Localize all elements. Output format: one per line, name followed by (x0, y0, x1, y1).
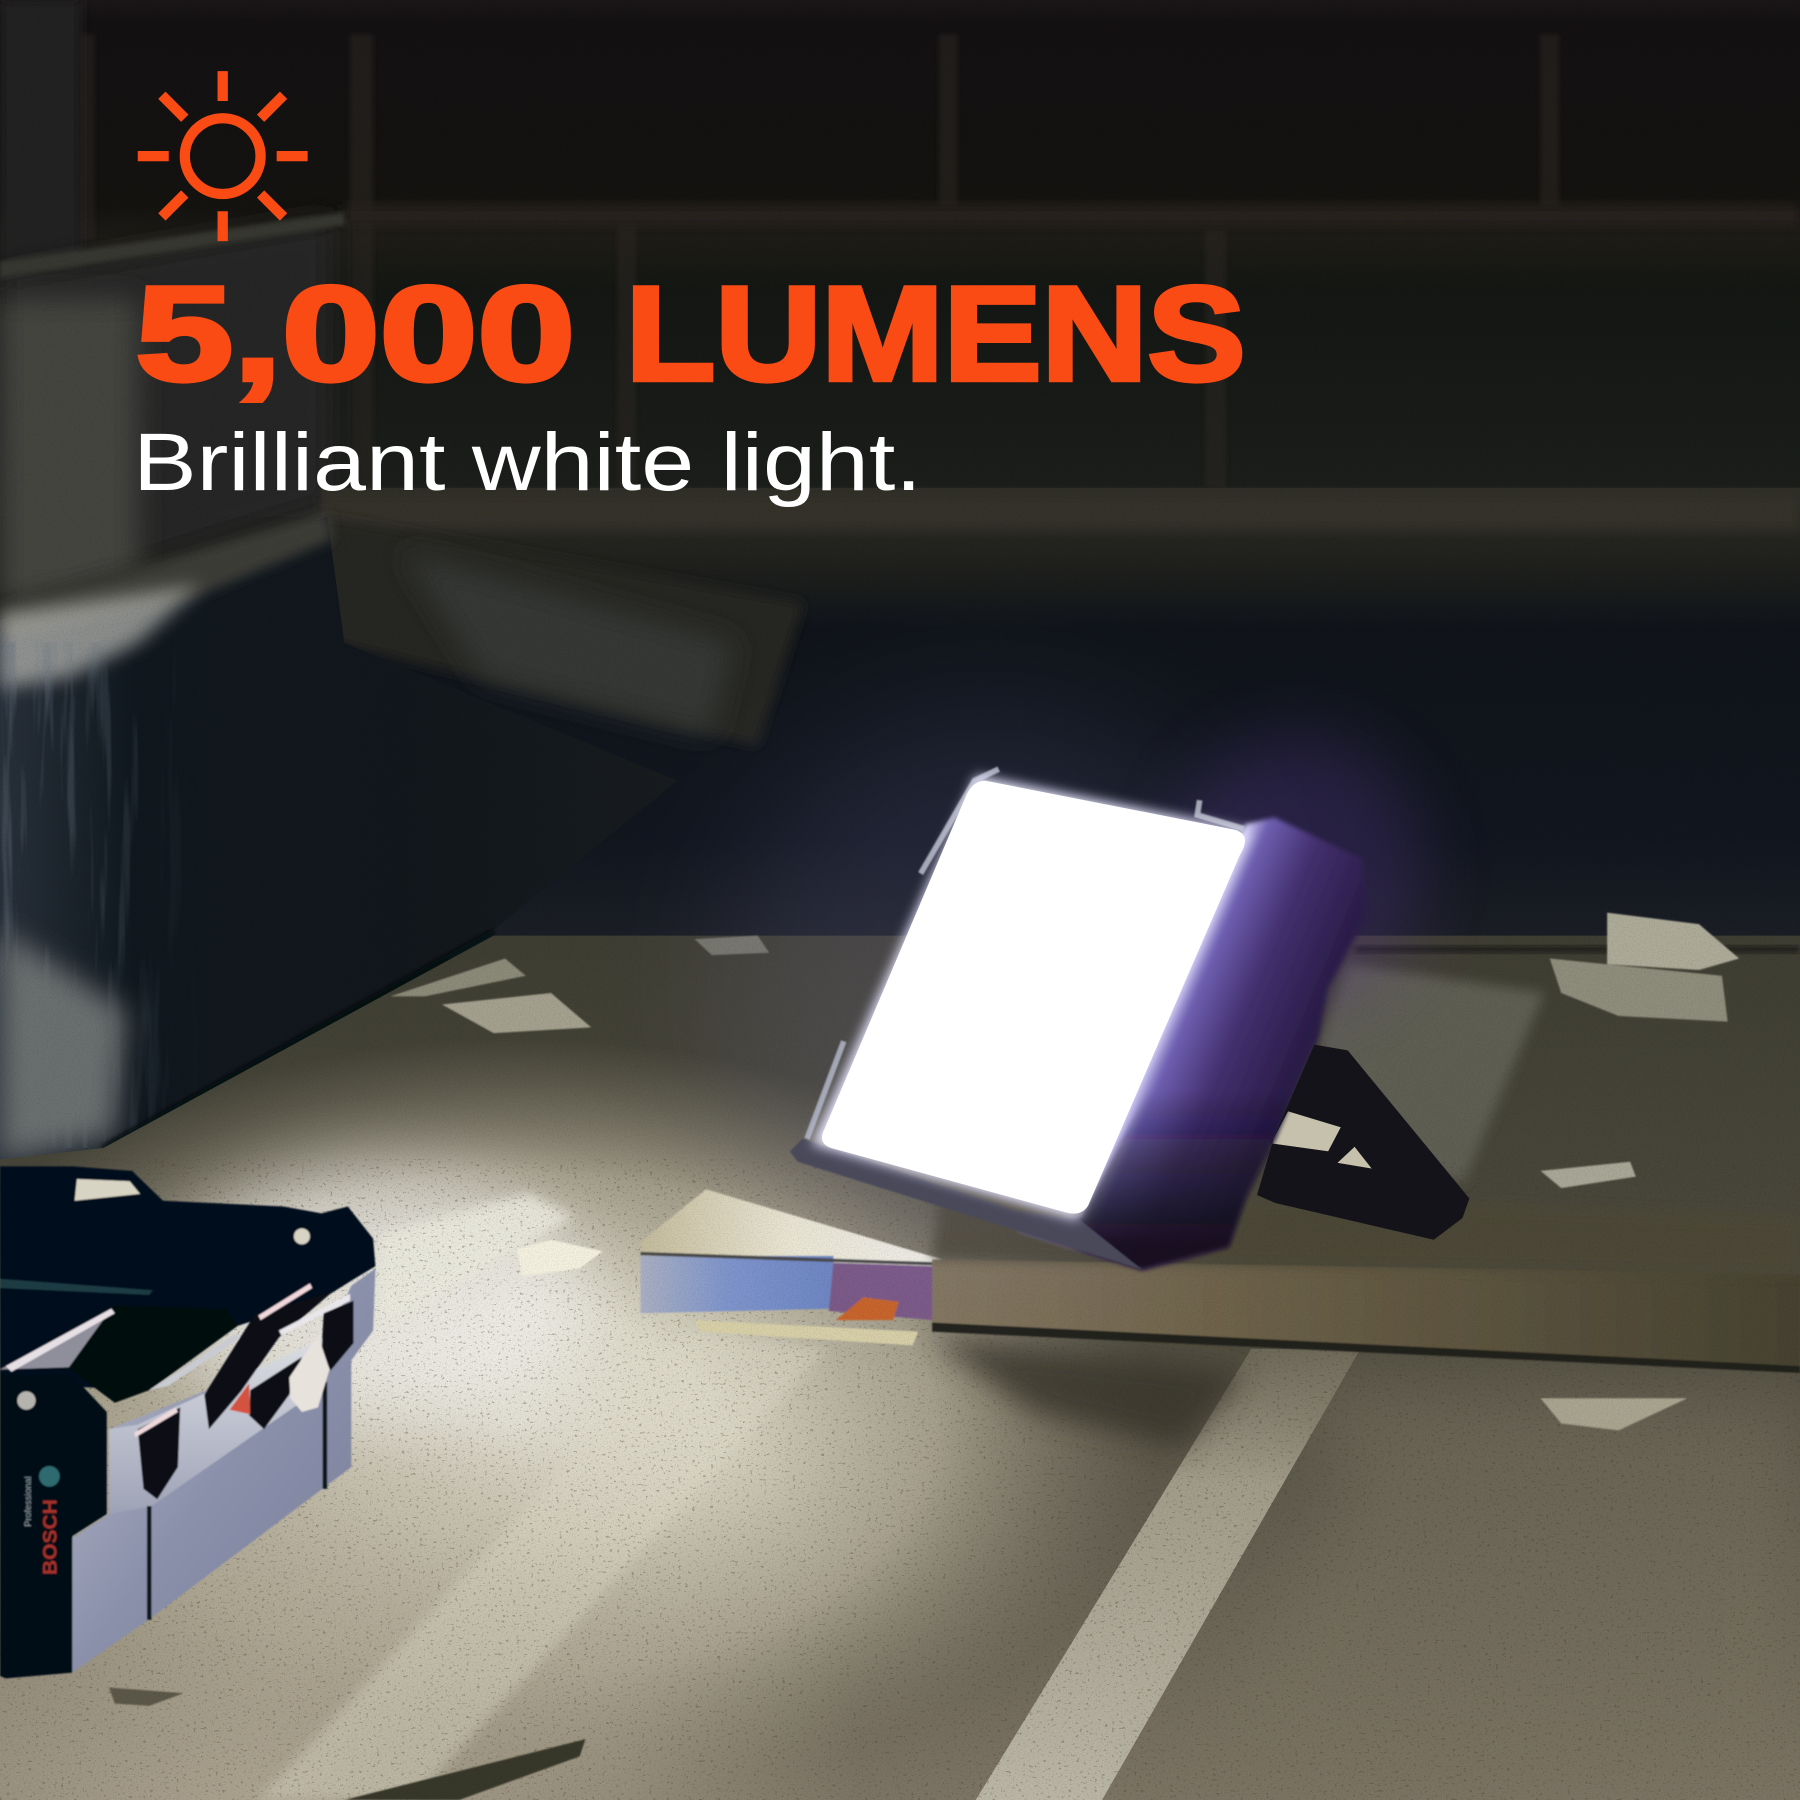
background: concrete ledge and blue shadow wall (321, 488, 1800, 959)
toolbox back wall (0, 1166, 375, 1390)
frame trims (807, 769, 1244, 1139)
toolbox black end (0, 1375, 107, 1678)
light glow (1171, 735, 1423, 1010)
title: LUMENS (626, 259, 1246, 409)
background: dark brick wall (0, 0, 1800, 608)
glowing panel (822, 781, 1245, 1214)
subtitle: Brilliant white light. (133, 417, 922, 508)
toolbox grey side (72, 1268, 375, 1673)
toolbox latches (138, 1407, 180, 1499)
background: left concrete mass (0, 510, 496, 1160)
toolbox open tray (67, 1305, 238, 1403)
background: debris on the floor (109, 913, 1739, 1800)
kickstand (1257, 1045, 1469, 1240)
toolbox handle opening (75, 1179, 140, 1201)
concrete slab and wooden beam (641, 1182, 1800, 1373)
background: floor (0, 936, 1800, 1800)
light back housing (1017, 817, 1366, 1270)
toolbox branding: BOSCH (39, 1499, 61, 1575)
kickstand backdrop (1271, 1111, 1372, 1169)
toolbox branding: Professional (23, 1476, 33, 1527)
lower frame (790, 1139, 1142, 1270)
icon: sun (138, 71, 308, 241)
work light (723, 712, 1469, 1270)
title (135, 259, 1246, 409)
panel bloom (818, 781, 1244, 1215)
title: 5,000 (135, 259, 575, 409)
toolbox branding (23, 1476, 61, 1575)
toolbox (0, 1166, 375, 1678)
